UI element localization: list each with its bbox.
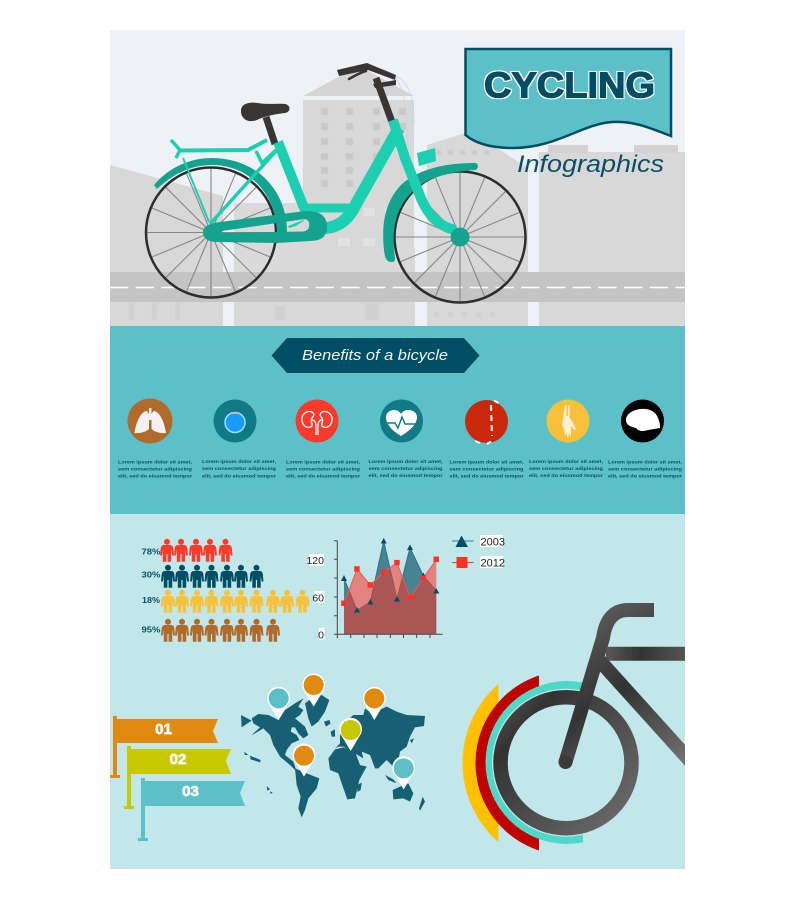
text block: benefit captions: Lorem ipsum dolor sit amet, (450, 460, 524, 466)
subtitle: Infographics: Infographics (517, 151, 664, 178)
fork and handlebar (566, 610, 654, 762)
text block: benefit captions: elit, sed do eiusmod tempor (529, 473, 603, 479)
text block: benefit captions: sem consectetur adipiscing (608, 466, 682, 472)
text block: benefit captions: Lorem ipsum dolor sit amet, (118, 460, 193, 466)
text block: benefit captions: elit, sed do eiusmod tempor (202, 474, 276, 480)
text block: benefit captions: Lorem ipsum dolor sit amet, (368, 459, 443, 465)
map pin: olive (339, 718, 362, 751)
row 95%: 95% (142, 624, 161, 634)
map pin: orange east (363, 687, 386, 720)
pictogram chart (142, 539, 310, 642)
row 18%: 18% (142, 595, 160, 605)
bicycle frame (278, 120, 456, 230)
text block: benefit captions: Lorem ipsum dolor sit amet, (608, 460, 683, 466)
chart legend: 2012 (480, 558, 505, 570)
front light (417, 148, 436, 166)
panel: benefits (110, 326, 685, 514)
icon: kidneys (296, 400, 338, 442)
rear rack (171, 140, 277, 224)
icon: hand bones (546, 400, 590, 442)
seat post and saddle (241, 103, 290, 144)
rear fender (154, 158, 287, 232)
row 30%: 30% (142, 570, 161, 580)
text block: benefit captions: elit, sed do eiusmod tempor (118, 474, 192, 480)
arc: red (476, 676, 539, 850)
arc: yellow (462, 684, 498, 842)
map pin: teal (267, 687, 290, 720)
icon: heart with pulse (380, 400, 423, 442)
text block: benefit captions: Lorem ipsum dolor sit amet, (529, 459, 604, 465)
area chart: 60 (312, 592, 324, 604)
text block: benefit captions: sem consectetur adipiscing (286, 466, 360, 472)
stem and handlebar (337, 63, 414, 150)
title banner (466, 49, 671, 148)
area chart (306, 538, 443, 642)
text block: benefit captions: sem consectetur adipiscing (450, 466, 524, 472)
area chart: 0 (318, 630, 324, 642)
map pin: orange south (293, 743, 315, 777)
flag 03: 03 (182, 783, 199, 800)
chain guard inner frame wedge (288, 219, 306, 228)
flag 02: 02 (170, 751, 186, 768)
text block: benefit captions: elit, sed do eiusmod tempor (608, 474, 682, 480)
flag 01: 01 (155, 721, 172, 738)
text block: benefit captions: elit, sed do eiusmod tempor (286, 474, 360, 480)
map pins (267, 673, 415, 789)
down tube (600, 661, 692, 763)
text block: benefit captions: sem consectetur adipiscing (529, 466, 603, 472)
partial bicycle graphic with coloured arcs (462, 610, 692, 868)
world map (241, 695, 425, 817)
front hub (450, 228, 470, 246)
top tube (606, 647, 686, 661)
row 78%: 78% (142, 546, 161, 556)
flag 03 (138, 778, 245, 841)
title: CYCLING: CYCLING (484, 64, 655, 106)
front fender (383, 163, 478, 262)
icon: red road circle (465, 400, 508, 444)
benefits heading ribbon (272, 338, 480, 373)
benefits heading ribbon: Benefits of a bicycle (302, 348, 448, 364)
arc: turquoise (486, 681, 583, 844)
icon: brain (621, 400, 664, 442)
text block: benefit captions: elit, sed do eiusmod tempor (368, 473, 443, 479)
chain guard (203, 211, 327, 243)
front wheel (394, 172, 526, 302)
chart legend: 2003 (480, 536, 505, 548)
map pin: teal south-east (392, 756, 415, 789)
panel: hero scene background (110, 30, 685, 326)
text block: benefit captions: Lorem ipsum dolor sit amet, (202, 459, 277, 465)
map pin: orange north (302, 673, 325, 707)
wheel ring (500, 697, 632, 828)
icon: blue ring (214, 400, 256, 442)
row 30% (142, 565, 264, 588)
text block: benefit captions: sem consectetur adipiscing (368, 466, 443, 472)
text block: benefit captions: sem consectetur adipiscing (118, 466, 192, 472)
icon: lungs (128, 398, 172, 444)
row 78% (142, 539, 232, 562)
row 95% (142, 619, 280, 642)
panel: statistics (110, 514, 685, 869)
row 18% (142, 590, 310, 613)
text block: benefit captions: sem consectetur adipiscing (202, 466, 276, 472)
text block: benefit captions (118, 459, 683, 480)
chart legend (452, 535, 505, 570)
flag 01 (110, 716, 218, 778)
bicycle illustration (146, 63, 526, 302)
flag 02 (124, 746, 231, 809)
text block: benefit captions: elit, sed do eiusmod tempor (450, 474, 524, 480)
rear wheel (146, 168, 276, 298)
area chart: 120 (306, 555, 324, 567)
text block: benefit captions: Lorem ipsum dolor sit amet, (286, 460, 361, 466)
